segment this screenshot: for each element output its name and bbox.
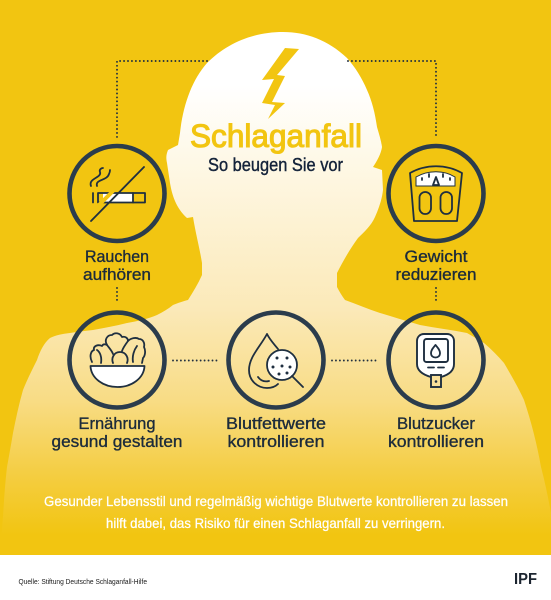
dotted connector: Ernährung to Blutfettwerte bbox=[173, 360, 218, 362]
logo: IPF: IPF bbox=[514, 571, 537, 588]
label: Rauchen aufhören: aufhören bbox=[83, 266, 151, 284]
label: Blutzucker kontrollieren: Blutzucker bbox=[397, 415, 476, 433]
label: Gewicht reduzieren bbox=[396, 248, 476, 284]
label: Blutzucker kontrollieren bbox=[388, 415, 484, 451]
subtitle: So beugen Sie vor bbox=[208, 155, 343, 175]
label: Blutzucker kontrollieren: kontrollieren bbox=[388, 433, 484, 451]
label: Ernährung gesund gestalten: Ernährung bbox=[78, 415, 156, 433]
label: Blutfettwerte kontrollieren: kontrollieren bbox=[228, 433, 324, 451]
summary text: Gesunder Lebensstil und regelmäßig wichtige Blutwerte kontrollieren zu lassen bbox=[44, 493, 508, 509]
icon: no smoking bbox=[70, 146, 164, 241]
label: Rauchen aufhören: Rauchen bbox=[85, 248, 149, 266]
label: Gewicht reduzieren: reduzieren bbox=[396, 266, 476, 284]
label: Blutfettwerte kontrollieren bbox=[226, 415, 326, 451]
icon: blood glucose meter bbox=[388, 312, 484, 408]
summary text bbox=[44, 493, 508, 531]
label: Blutfettwerte kontrollieren: Blutfettwerte bbox=[226, 415, 326, 433]
label: Ernährung gesund gestalten bbox=[52, 415, 182, 451]
footer panel bbox=[0, 555, 551, 600]
icon: lightning bolt bbox=[262, 48, 299, 119]
source text: Quelle: Stiftung Deutsche Schlaganfall-Hilfe bbox=[18, 579, 147, 586]
summary text: hilft dabei, das Risiko für einen Schlaganfall zu verringern. bbox=[106, 515, 445, 531]
dotted connector: Blutfettwerte to Blutzucker bbox=[332, 360, 379, 362]
label: Ernährung gesund gestalten: gesund gestalten bbox=[52, 433, 182, 451]
dotted connector: Rauchen to Ernährung bbox=[116, 288, 118, 303]
label: Rauchen aufhören bbox=[83, 248, 151, 284]
icon: drop with magnifier bbox=[228, 312, 324, 408]
icon: salad bowl bbox=[70, 312, 164, 408]
dotted connector: Gewicht to Blutzucker bbox=[435, 288, 437, 303]
label: Gewicht reduzieren: Gewicht bbox=[404, 248, 468, 266]
dotted connector: head to Rauchen bbox=[117, 61, 207, 137]
title: Schlaganfall bbox=[190, 118, 362, 154]
dotted connector: head to Gewicht bbox=[348, 61, 436, 137]
icon: scale bbox=[388, 146, 484, 241]
